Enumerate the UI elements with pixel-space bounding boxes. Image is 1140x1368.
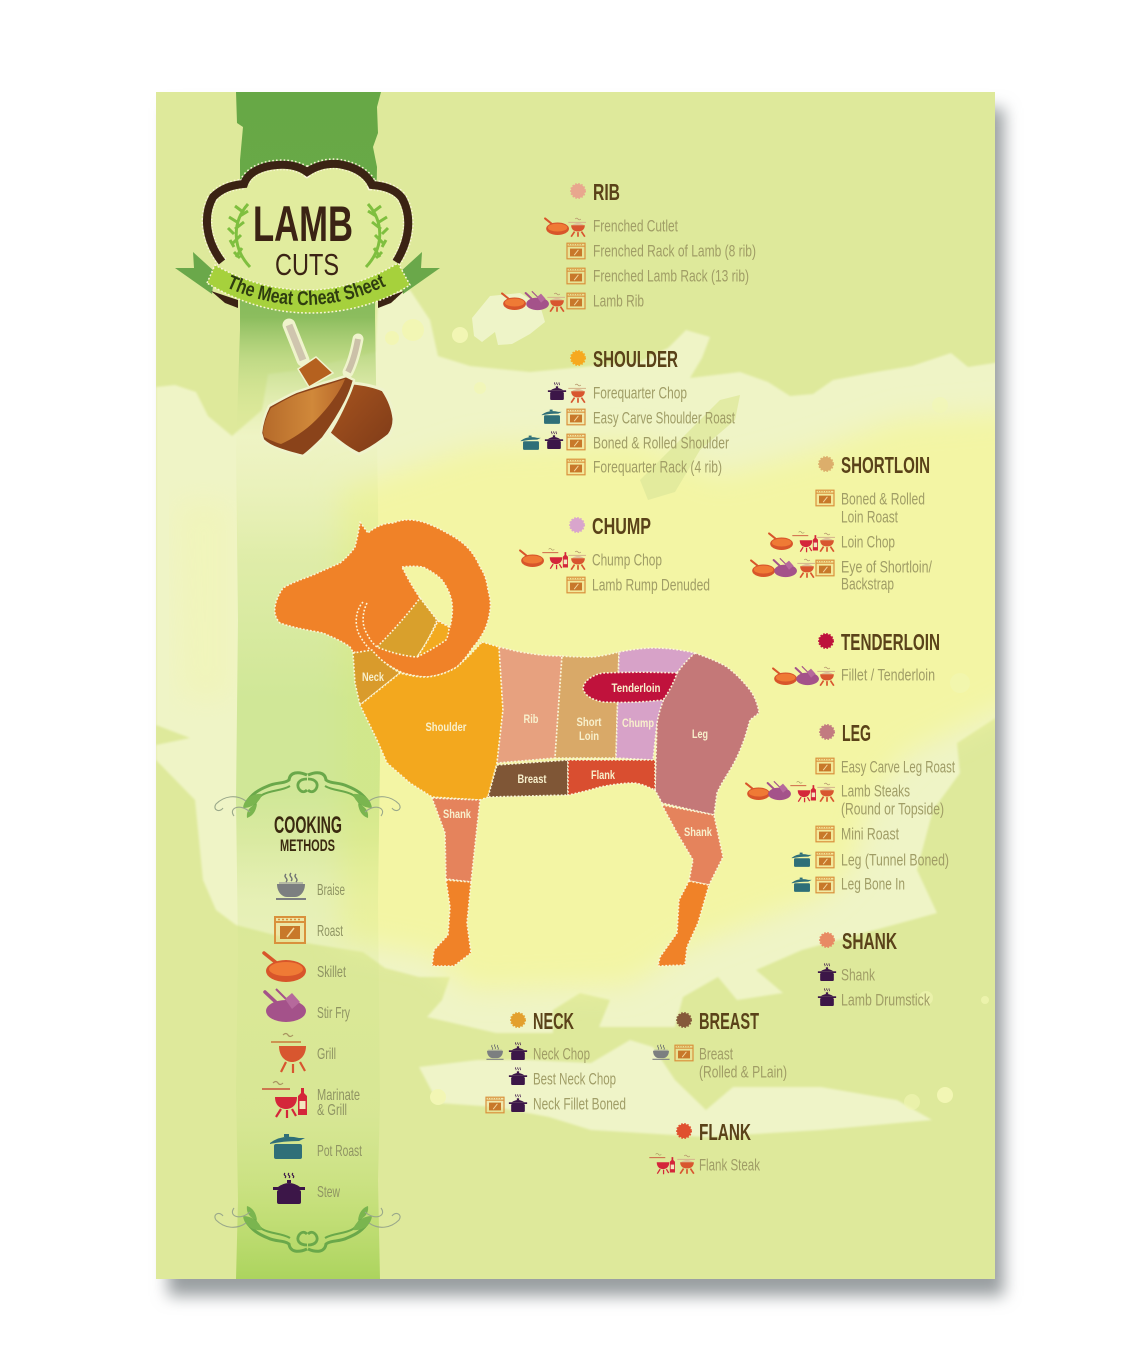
dot shoulder bbox=[571, 351, 585, 365]
row: eye of shortloin: Backstrap bbox=[841, 574, 894, 594]
label stew: Stew bbox=[317, 1184, 340, 1201]
poster background bbox=[156, 92, 1040, 1279]
heading LAMB: LAMB bbox=[253, 196, 353, 252]
laurel right bbox=[366, 204, 388, 267]
heading chump: CHUMP bbox=[592, 513, 651, 539]
dot breast bbox=[677, 1013, 691, 1027]
rear hoof bbox=[658, 881, 709, 966]
row: lamb steaks: Lamb Steaks bbox=[841, 782, 910, 800]
leg bbox=[655, 653, 759, 815]
cream blob lower bbox=[419, 1040, 932, 1137]
label short loin: Short bbox=[576, 715, 602, 729]
flank bbox=[568, 760, 655, 795]
label short loin line two: Loin bbox=[579, 729, 599, 743]
row: frenched rack of lamb: Frenched Rack of Lamb (8 rib) bbox=[593, 242, 756, 260]
row: breast rolled and plain bbox=[652, 1044, 787, 1082]
icon: marinate and grill bbox=[262, 1082, 307, 1118]
row: boned and rolled loin roast: Boned & Rolled bbox=[841, 490, 925, 508]
row: mini roast bbox=[816, 824, 899, 844]
label front shank: Shank bbox=[443, 807, 471, 821]
subtitle: The Meat Cheat Sheet bbox=[230, 274, 386, 306]
label braise: Braise bbox=[317, 882, 345, 899]
heading tenderloin: TENDERLOIN bbox=[841, 629, 940, 655]
row: forequarter chop bbox=[548, 382, 687, 403]
row: leg bone in: Leg Bone In bbox=[841, 874, 905, 894]
row: eye of shortloin: Eye of Shortloin/ bbox=[841, 558, 932, 576]
row: easy carve leg roast: Easy Carve Leg Roast bbox=[841, 758, 955, 776]
cream blob near rib bbox=[472, 293, 545, 345]
row: chump chop bbox=[520, 548, 662, 570]
row: forequarter rack: Forequarter Rack (4 rib) bbox=[593, 458, 722, 476]
row: easy carve shoulder roast bbox=[542, 408, 735, 428]
lamb chops illustration bbox=[261, 325, 394, 456]
row: breast rolled and plain: (Rolled & PLain) bbox=[699, 1062, 787, 1082]
row: forequarter rack bbox=[567, 458, 722, 476]
row: lamb steaks: (Round or Topside) bbox=[841, 800, 944, 818]
row: fillet tenderloin: Fillet / Tenderloin bbox=[841, 666, 935, 684]
row: frenched lamb rack: Frenched Lamb Rack (13 rib) bbox=[593, 266, 749, 286]
row: boned and rolled shoulder bbox=[521, 431, 729, 452]
heading neck: NECK bbox=[533, 1008, 574, 1034]
row: lamb steaks bbox=[746, 781, 944, 818]
left pale yellow wash bbox=[185, 510, 223, 689]
left chop bbox=[261, 325, 354, 456]
yellow wash bbox=[340, 410, 1040, 990]
panel: chump bbox=[520, 513, 710, 594]
row: shank: Shank bbox=[841, 966, 875, 984]
row: breast rolled and plain: Breast bbox=[699, 1044, 733, 1064]
label rib: Rib bbox=[524, 712, 538, 726]
dot flank bbox=[677, 1124, 691, 1138]
icon: skillet bbox=[264, 953, 306, 982]
icon: stir fry bbox=[265, 989, 306, 1022]
ribbon tail right bbox=[400, 252, 440, 294]
cloud frame bbox=[207, 164, 408, 300]
heading shoulder: SHOULDER bbox=[593, 346, 678, 372]
row: frenched lamb rack bbox=[567, 266, 749, 286]
row: lamb rib: Lamb Rib bbox=[593, 292, 644, 310]
dot tenderloin bbox=[819, 634, 833, 648]
label marinate: Marinate bbox=[317, 1087, 360, 1104]
row: frenched cutlet: Frenched Cutlet bbox=[593, 216, 678, 236]
row: loin chop bbox=[769, 531, 895, 552]
breast bbox=[488, 760, 568, 797]
label grill: Grill bbox=[317, 1046, 336, 1063]
row: neck fillet boned: Neck Fillet Boned bbox=[533, 1094, 626, 1114]
ornament bottom bbox=[215, 1206, 400, 1251]
front hoof bbox=[432, 880, 471, 966]
label rear shank: Shank bbox=[684, 825, 712, 839]
panel: shoulder bbox=[521, 346, 735, 476]
row: forequarter chop: Forequarter Chop bbox=[593, 384, 687, 402]
ribbon fold right bbox=[378, 291, 404, 308]
label shoulder: Shoulder bbox=[426, 720, 467, 734]
paint splashes bbox=[385, 319, 989, 1110]
front shank bbox=[432, 798, 480, 882]
heading breast: BREAST bbox=[699, 1008, 759, 1034]
dot leg bbox=[820, 725, 834, 739]
label breast: Breast bbox=[518, 772, 546, 786]
heading methods: METHODS bbox=[280, 836, 335, 855]
label roast: Roast bbox=[317, 923, 343, 940]
icon: grill bbox=[271, 1034, 306, 1073]
chump bbox=[616, 648, 695, 760]
row: neck chop: Neck Chop bbox=[533, 1044, 590, 1064]
label chump: Chump bbox=[622, 716, 654, 730]
cooking methods legend bbox=[215, 773, 400, 1251]
row: boned and rolled loin roast bbox=[816, 490, 925, 526]
label and grill: & Grill bbox=[317, 1102, 347, 1119]
icon: pot roast bbox=[270, 1134, 305, 1159]
shoulder bbox=[360, 642, 503, 800]
label flank: Flank bbox=[591, 768, 615, 782]
heading rib: RIB bbox=[593, 179, 620, 205]
panel: breast bbox=[652, 1008, 787, 1082]
dot shank bbox=[820, 933, 834, 947]
dot shortloin bbox=[819, 457, 833, 471]
tenderloin bbox=[583, 672, 677, 702]
row: leg tunnel boned bbox=[792, 850, 949, 870]
green vertical strip bbox=[236, 92, 381, 1279]
ornament top bbox=[215, 773, 400, 818]
right chop bbox=[329, 339, 394, 454]
title badge bbox=[175, 158, 440, 314]
row: boned and rolled shoulder: Boned & Rolled Shoulder bbox=[593, 434, 729, 452]
row: best neck chop: Best Neck Chop bbox=[533, 1070, 616, 1088]
row: fillet tenderloin bbox=[773, 666, 935, 686]
panel: shortloin bbox=[751, 452, 932, 594]
icon: roast bbox=[275, 917, 305, 943]
row: frenched cutlet bbox=[545, 216, 678, 237]
row: leg bone in bbox=[792, 874, 905, 894]
label stir fry: Stir Fry bbox=[317, 1005, 350, 1022]
panel: leg bbox=[746, 720, 955, 894]
ribbon band bbox=[207, 263, 410, 313]
row: easy carve shoulder roast: Easy Carve Shoulder Roast bbox=[593, 408, 735, 428]
rear shank bbox=[662, 805, 723, 885]
heading cooking: COOKING bbox=[274, 812, 342, 839]
ribbon tail left bbox=[175, 252, 215, 294]
heading flank: FLANK bbox=[699, 1119, 751, 1145]
row: mini roast: Mini Roast bbox=[841, 824, 899, 844]
row: lamb rib bbox=[502, 291, 644, 312]
neck bbox=[353, 650, 400, 705]
icon: braise bbox=[276, 873, 306, 900]
row: leg tunnel boned: Leg (Tunnel Boned) bbox=[841, 850, 949, 870]
row: lamb drumstick: Lamb Drumstick bbox=[841, 990, 930, 1010]
icon: stew bbox=[273, 1173, 305, 1204]
row: easy carve leg roast bbox=[816, 758, 955, 776]
panel: flank bbox=[649, 1119, 760, 1174]
head and horn bbox=[275, 520, 490, 677]
watercolor wash bbox=[156, 290, 1000, 1033]
rib bbox=[497, 647, 562, 763]
dot neck bbox=[511, 1013, 525, 1027]
row: lamb rump denuded bbox=[567, 576, 710, 594]
row: chump chop: Chump Chop bbox=[592, 550, 662, 570]
heading shank: SHANK bbox=[842, 928, 897, 954]
panel: shank bbox=[818, 928, 930, 1010]
row: lamb rump denuded: Lamb Rump Denuded bbox=[592, 576, 710, 594]
laurel left bbox=[228, 204, 250, 267]
horn inner segments bbox=[377, 598, 437, 657]
row: frenched rack of lamb bbox=[567, 242, 756, 260]
ribbon fold left bbox=[211, 291, 238, 308]
dot chump bbox=[570, 518, 584, 532]
row: eye of shortloin bbox=[751, 558, 932, 594]
short loin bbox=[555, 652, 619, 758]
panel: rib bbox=[502, 179, 756, 312]
dot rib bbox=[571, 184, 585, 198]
label leg: Leg bbox=[692, 727, 708, 741]
heading leg: LEG bbox=[842, 720, 871, 746]
label skillet: Skillet bbox=[317, 964, 346, 981]
heading shortloin: SHORTLOIN bbox=[841, 452, 930, 478]
panel: tenderloin bbox=[773, 629, 940, 686]
label neck: Neck bbox=[362, 670, 384, 684]
page shadow bbox=[168, 108, 1004, 1296]
row: loin chop: Loin Chop bbox=[841, 532, 895, 552]
row: flank steak: Flank Steak bbox=[699, 1156, 760, 1174]
ram cut diagram bbox=[275, 520, 759, 966]
label pot roast: Pot Roast bbox=[317, 1143, 362, 1160]
heading CUTS: CUTS bbox=[275, 247, 339, 282]
label tenderloin: Tenderloin bbox=[612, 681, 660, 695]
green swirl bbox=[640, 395, 740, 500]
panel: neck bbox=[486, 1008, 626, 1114]
row: boned and rolled loin roast: Loin Roast bbox=[841, 508, 898, 526]
